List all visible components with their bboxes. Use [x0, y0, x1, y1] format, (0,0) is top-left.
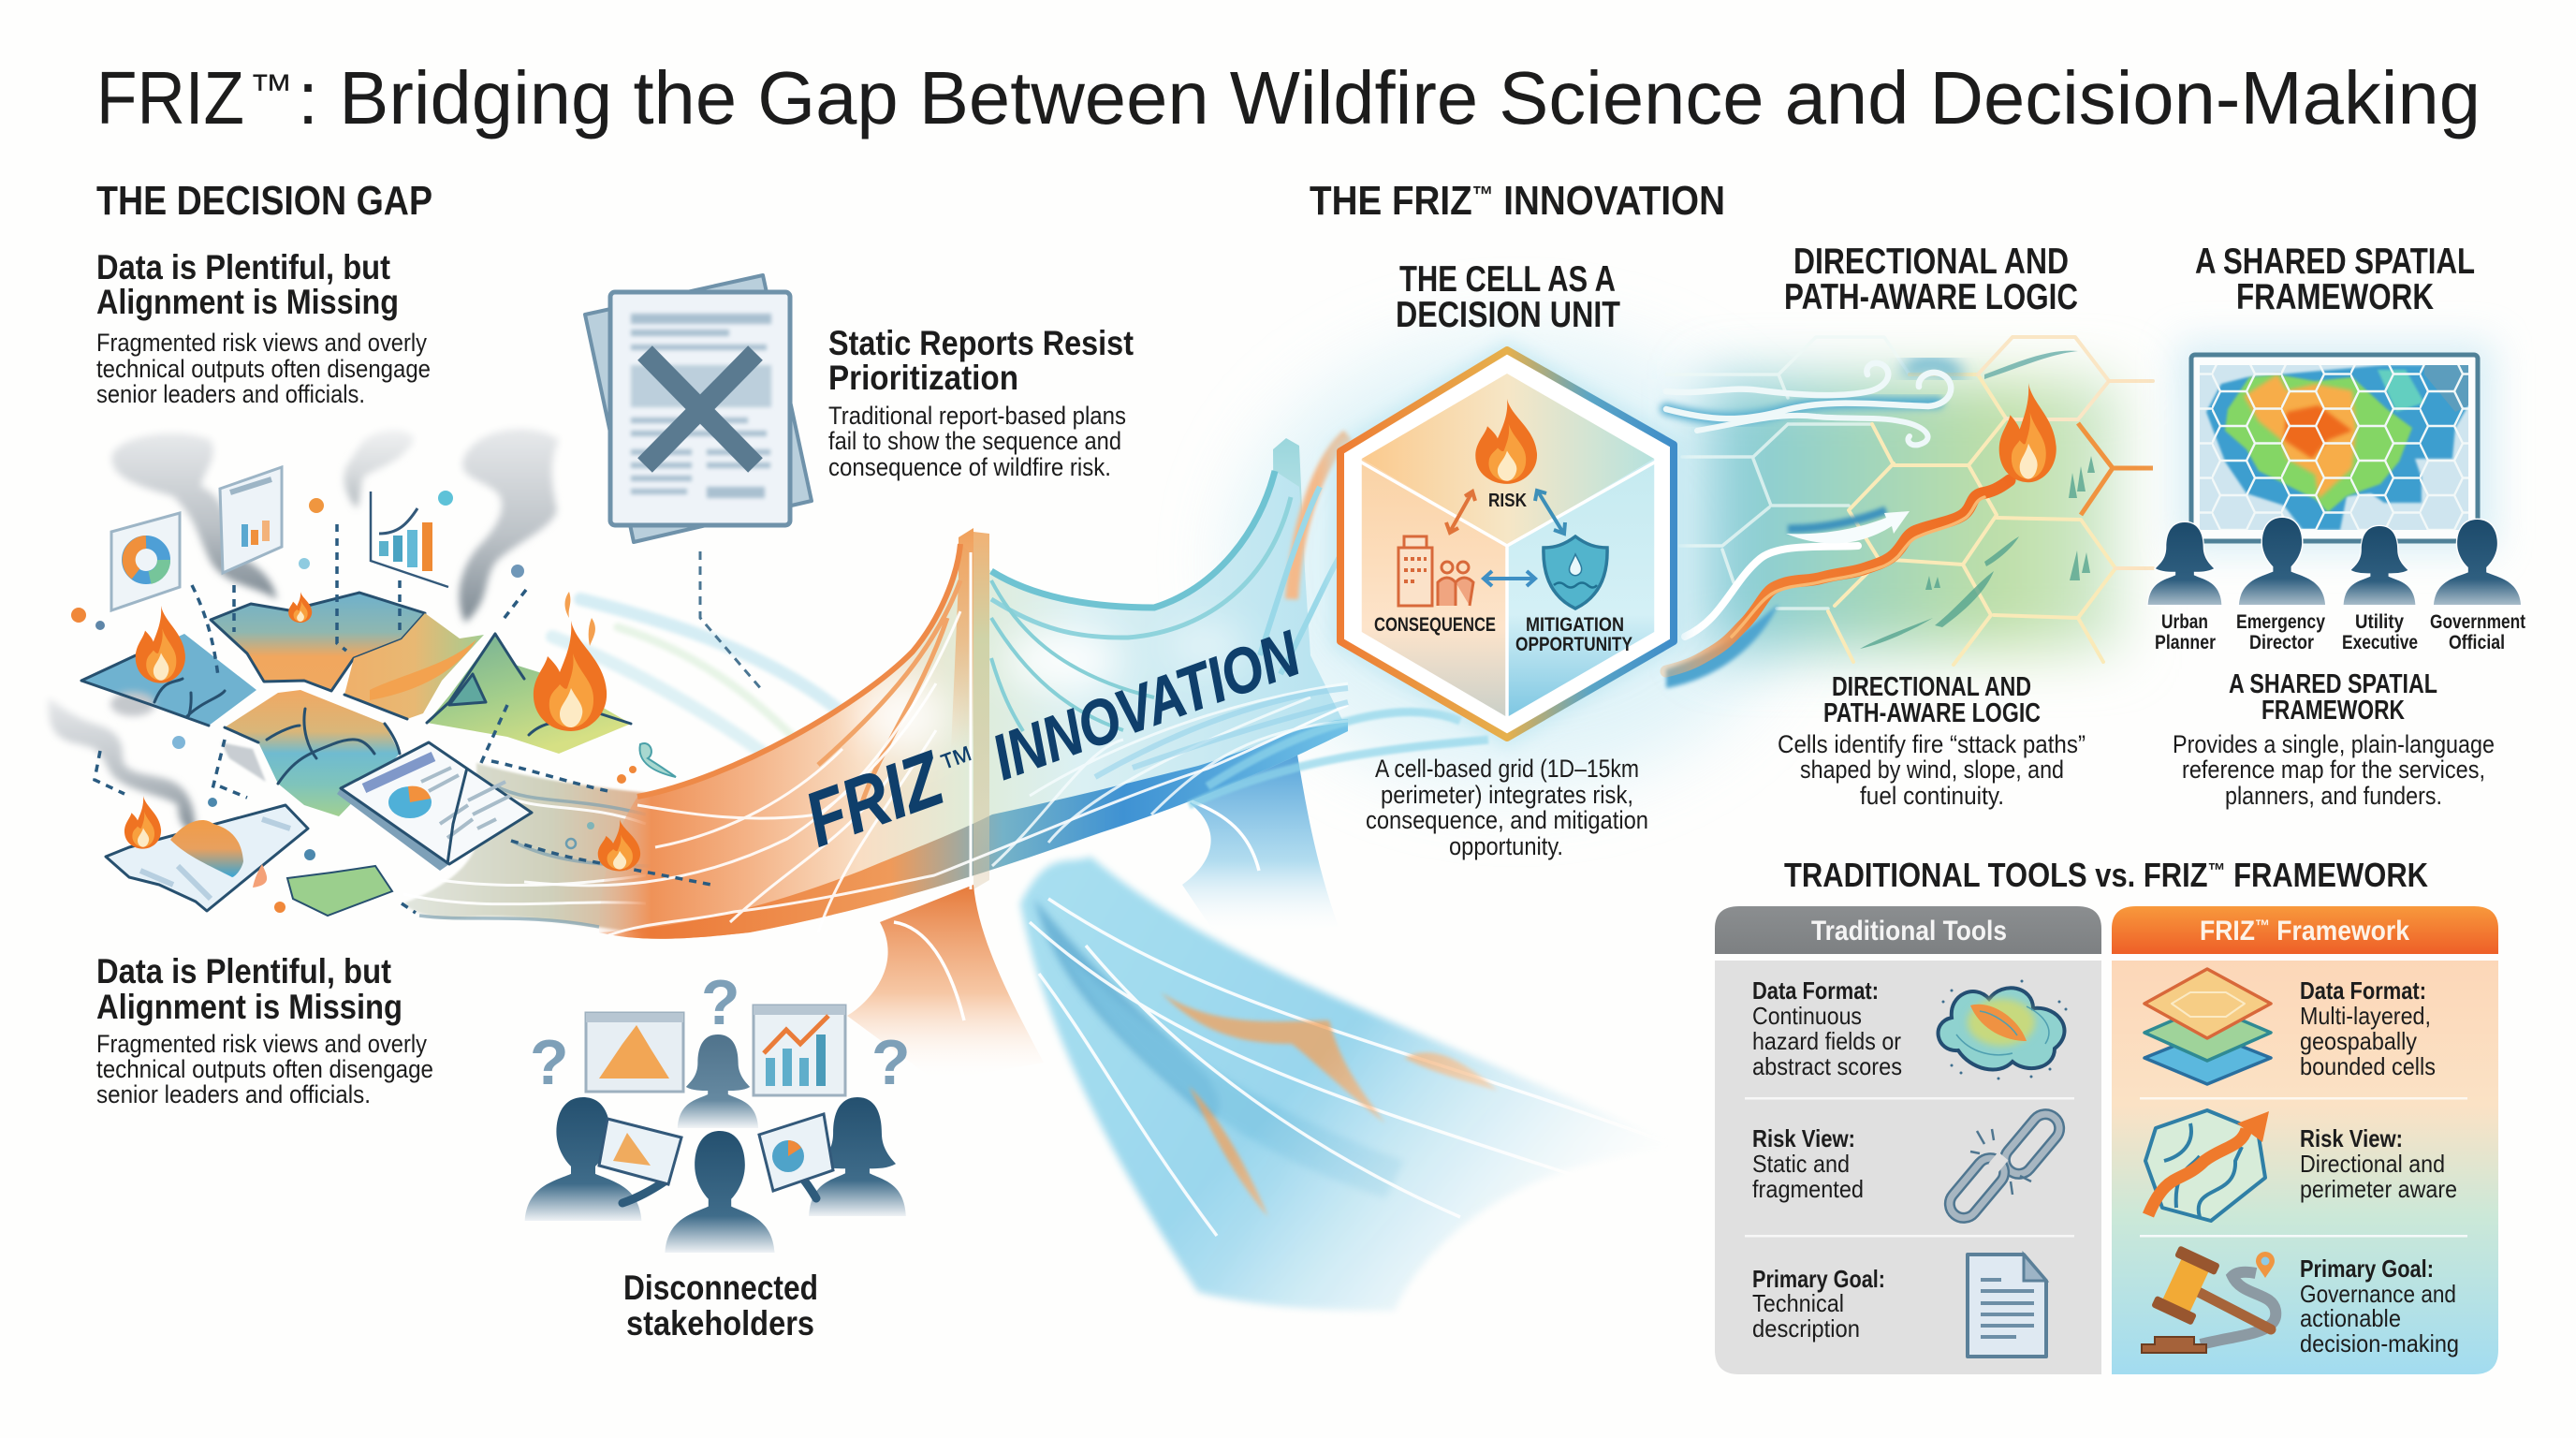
section heading: the FRIZ innovation: THE FRIZ [1310, 178, 1495, 224]
green map scrap [287, 866, 392, 916]
text block: data is plentiful (top): Data is Plentiful, but [96, 248, 390, 286]
screens [586, 1005, 845, 1095]
white gaps in the sail [858, 624, 1247, 756]
screen glow [2176, 342, 2495, 552]
gavel handle [2186, 1285, 2271, 1329]
text block: shared framework [2173, 669, 2495, 810]
row: primary goal: Governance and [2300, 1280, 2456, 1308]
wind streams from the cell [1666, 363, 1956, 445]
section heading: the FRIZ innovation: INNOVATION [1494, 178, 1725, 224]
screen frame [2191, 355, 2478, 541]
heading: shared spatial framework: FRAMEWORK [2236, 277, 2434, 317]
heading: shared spatial framework: A SHARED SPATIAL [2195, 242, 2475, 282]
text block: data is plentiful (bottom): technical outputs often disengage [96, 1055, 433, 1083]
header label: Traditional Tools [1811, 916, 2007, 946]
left tower [951, 528, 989, 889]
fire attack path [1666, 480, 2010, 671]
question marks: ? [530, 1027, 569, 1098]
text block: data is plentiful (bottom): Alignment is Missing [96, 988, 402, 1026]
row: primary goal: description [1752, 1314, 1860, 1343]
text block: data is plentiful (bottom): Data is Plentiful, but [96, 952, 391, 990]
mitigation label: OPPORTUNITY [1515, 634, 1632, 655]
audience labels: Executive [2342, 632, 2418, 653]
gavel base [2142, 1337, 2206, 1353]
text block: cell description: perimeter) integrates risk, [1381, 781, 1633, 809]
tablets [599, 1114, 833, 1191]
row divider [2140, 1235, 2467, 1238]
audience labels: Government [2430, 611, 2525, 633]
tail strands [403, 791, 646, 904]
row: data format: hazard fields or [1752, 1027, 1901, 1055]
location pin [2256, 1252, 2275, 1278]
right tower [1273, 438, 1310, 712]
text block: static reports: Prioritization [828, 359, 1018, 397]
white direction arrow [1666, 510, 1910, 688]
text block: cell description [1366, 755, 1648, 860]
loose paper map [106, 805, 308, 911]
soft glow around the cell [1236, 337, 1797, 786]
text block: shared framework: A SHARED SPATIAL [2229, 669, 2437, 699]
row: risk view [2300, 1124, 2457, 1203]
text block: shared framework: reference map for the services, [2182, 756, 2485, 784]
row divider [2140, 1097, 2467, 1099]
bridge label: FRIZ [795, 736, 956, 863]
icon: document [1968, 1255, 2046, 1357]
panel body [1715, 961, 2101, 1374]
row divider [1745, 1235, 2074, 1238]
heat map [2200, 365, 2468, 530]
text block: directional logic: PATH-AWARE LOGIC [1823, 698, 2041, 728]
audience labels: Emergency [2236, 611, 2325, 633]
title: ™ [249, 65, 293, 113]
floating dashboard: report [220, 467, 282, 573]
text block: static reports: fail to show the sequence and [828, 427, 1121, 455]
row: data format: Data Format: [2300, 976, 2426, 1005]
map fragments [81, 593, 631, 816]
heading: cell as a decision unit: THE CELL AS A [1399, 259, 1616, 300]
audience labels: Director [2249, 632, 2314, 653]
panel: FRIZ framework [2112, 906, 2498, 1374]
bridge label: INNOVATION [984, 617, 1310, 794]
illustration: disconnected stakeholders [525, 967, 911, 1253]
mitigation label: MITIGATION [1526, 614, 1624, 636]
right sector [1507, 458, 1656, 719]
text block: data is plentiful (top): Alignment is Missing [96, 283, 399, 321]
vegetation marks [1860, 351, 2095, 649]
heading: cell as a decision unit [1396, 259, 1620, 335]
comparison heading: TRADITIONAL TOOLS vs. FRIZ [1784, 856, 2277, 894]
heading: directional logic: DIRECTIONAL AND [1793, 242, 2069, 282]
icon: layered cells [2144, 969, 2271, 1084]
hex cell outlines, cream [1828, 337, 2153, 665]
text block: cell description: A cell-based grid (1D–15km [1375, 755, 1639, 783]
row: data format: geospabally [2300, 1027, 2417, 1055]
text block: directional logic: DIRECTIONAL AND [1832, 672, 2031, 702]
text block: data is plentiful (top): senior leaders and officials. [96, 380, 365, 408]
section heading: the FRIZ innovation: ™ [1472, 181, 1494, 209]
illustration: fragmented risk maps [49, 429, 711, 916]
floating dashboard: donut [111, 513, 180, 610]
row: data format: Multi-layered, [2300, 1002, 2431, 1030]
row: risk view: perimeter aware [2300, 1175, 2457, 1203]
text block: data is plentiful (bottom): senior leaders and officials. [96, 1080, 371, 1108]
blue pier [1182, 749, 1339, 936]
audience labels [2155, 611, 2525, 653]
top sector [1360, 372, 1656, 546]
right person [809, 1097, 906, 1216]
row: risk view: fragmented [1752, 1175, 1864, 1203]
row: data format [1752, 976, 1902, 1080]
text block: shared framework: Provides a single, plain-language [2173, 730, 2495, 758]
bridge label: ™ [934, 737, 982, 790]
front person [665, 1131, 775, 1253]
header label: ™ [2255, 917, 2270, 935]
text block: static reports: consequence of wildfire risk. [828, 453, 1111, 481]
row: data format: Data Format: [1752, 976, 1879, 1005]
terrain colour wash [1708, 379, 2120, 651]
gavel head [2151, 1245, 2220, 1326]
text block: data is plentiful (top): technical outputs often disengage [96, 355, 431, 383]
bridge label [795, 607, 1311, 863]
text block: directional logic: shaped by wind, slope, and [1800, 756, 2064, 784]
risk label: RISK [1488, 491, 1527, 511]
text block: data is plentiful (top) [96, 248, 431, 408]
row: data format: bounded cells [2300, 1052, 2436, 1080]
row divider [1745, 1097, 2074, 1099]
lower deck edge [599, 719, 1348, 939]
row: primary goal: Primary Goal: [2300, 1255, 2434, 1283]
illustration: FRIZ bridge [403, 337, 1797, 1311]
row: data format [2300, 976, 2436, 1080]
section heading: the decision gap: THE DECISION GAP [96, 178, 432, 224]
hex frame [1340, 350, 1674, 738]
comparison heading: ™ [2208, 858, 2225, 882]
row: risk view: Directional and [2300, 1150, 2445, 1178]
report sheet [337, 742, 532, 871]
flames [124, 592, 640, 871]
text block: data is plentiful (top): Fragmented risk views and overly [96, 329, 427, 357]
text block: directional logic [1778, 672, 2086, 810]
audience labels: Utility [2355, 611, 2404, 633]
title: : Bridging the Gap Between Wildfire Science and Decision-Making [298, 56, 2481, 139]
data points and dashed connectors [71, 491, 711, 913]
icon: building and people [1398, 536, 1473, 606]
consequence label: CONSEQUENCE [1374, 614, 1496, 636]
row: primary goal: decision-making [2300, 1329, 2459, 1357]
text block: cell description: consequence, and mitigation [1366, 806, 1648, 834]
inner lines [1360, 372, 1656, 719]
question marks [530, 967, 911, 1098]
text block: directional logic: fuel continuity. [1860, 782, 2004, 810]
row: primary goal: actionable [2300, 1304, 2401, 1332]
row: primary goal: Technical [1752, 1289, 1844, 1317]
hexagon: the cell as a decision unit [1331, 341, 1683, 747]
orange pier [847, 885, 1044, 1081]
icon: gavel and road [2142, 1245, 2276, 1353]
panel header [2112, 906, 2498, 954]
text block: data is plentiful (bottom) [96, 952, 433, 1108]
glow [1331, 341, 1683, 747]
illustration: shared spatial map with audience [2148, 342, 2525, 653]
road [2201, 1272, 2276, 1344]
mitigation label [1515, 614, 1632, 655]
row: primary goal [2300, 1255, 2459, 1357]
heading: directional logic [1784, 242, 2078, 317]
tail shading [419, 786, 655, 927]
audience labels: Official [2449, 632, 2505, 653]
dashed link from report to bridge [700, 551, 762, 690]
caption: disconnected stakeholders: stakeholders [626, 1304, 814, 1343]
pier highlights [894, 801, 1259, 1020]
heading: cell as a decision unit: DECISION UNIT [1396, 295, 1620, 335]
text block: data is plentiful (bottom): Fragmented risk views and overly [96, 1030, 427, 1058]
pale streams behind the bridge [552, 599, 852, 763]
panel header [1715, 906, 2101, 954]
grey map scrap [221, 742, 266, 782]
text block: directional logic: Cells identify fire “sttack paths” [1778, 730, 2086, 758]
back person [678, 1034, 758, 1128]
left sector [1360, 458, 1507, 719]
flame [1999, 383, 2056, 482]
cables and strands [524, 435, 1488, 935]
caption: disconnected stakeholders: Disconnected [623, 1269, 818, 1307]
icon: hazard cloud [1939, 979, 2067, 1080]
heading: directional logic: PATH-AWARE LOGIC [1784, 277, 2078, 317]
row: primary goal [1752, 1265, 1885, 1343]
comparison heading: FRAMEWORK [2225, 856, 2428, 894]
row: risk view: Static and [1752, 1150, 1850, 1178]
grey tail of the deck [403, 763, 674, 936]
caption: disconnected stakeholders [623, 1269, 818, 1343]
icon: broken chain [1944, 1108, 2065, 1224]
pointing arms [622, 1168, 816, 1203]
row: risk view: Risk View: [1752, 1124, 1855, 1152]
smoke plumes [112, 429, 559, 623]
audience labels: Urban [2161, 611, 2208, 633]
text block: shared framework: planners, and funders. [2225, 782, 2442, 810]
deck and sail [599, 471, 1348, 939]
text block: cell description: opportunity. [1449, 832, 1563, 860]
row: primary goal: Primary Goal: [1752, 1265, 1885, 1293]
heading: shared spatial framework [2195, 242, 2475, 317]
panel body [2112, 961, 2498, 1374]
audience silhouettes [2148, 518, 2521, 605]
panel: traditional tools [1715, 906, 2101, 1374]
text block: static reports: Static Reports Resist [828, 324, 1134, 362]
map hazard patches and cracks [81, 634, 631, 784]
question marks: ? [871, 1027, 911, 1098]
text block: static reports: Traditional report-based plans [828, 402, 1126, 430]
text block: static reports [828, 324, 1134, 481]
row: data format: Continuous [1752, 1002, 1862, 1030]
question marks: ? [701, 967, 740, 1038]
river ribbons [1020, 857, 1685, 1311]
icon: directional path hexagon [2145, 1110, 2269, 1221]
left person [525, 1097, 641, 1221]
floating bar chart [371, 492, 448, 587]
row: risk view: Risk View: [2300, 1124, 2403, 1152]
hex edges around the flame, orange [2078, 423, 2153, 515]
text block: shared framework: FRAMEWORK [2261, 696, 2405, 726]
row: risk view [1752, 1124, 1864, 1203]
icon: risk flame [1475, 399, 1537, 484]
icon: water shield [1544, 536, 1607, 609]
title: FRIZ [96, 56, 244, 139]
header label: FRIZ [2200, 916, 2262, 946]
illustration: directional terrain cells [1666, 337, 2153, 688]
audience labels: Planner [2155, 632, 2216, 653]
hex cell outlines, white [1666, 337, 1910, 609]
icon: crossed-out static report [585, 275, 812, 542]
row: data format: abstract scores [1752, 1052, 1902, 1080]
header label: Framework [2270, 916, 2409, 946]
smoke plume over the lower map [49, 692, 195, 835]
arrows between factors [1446, 491, 1565, 586]
